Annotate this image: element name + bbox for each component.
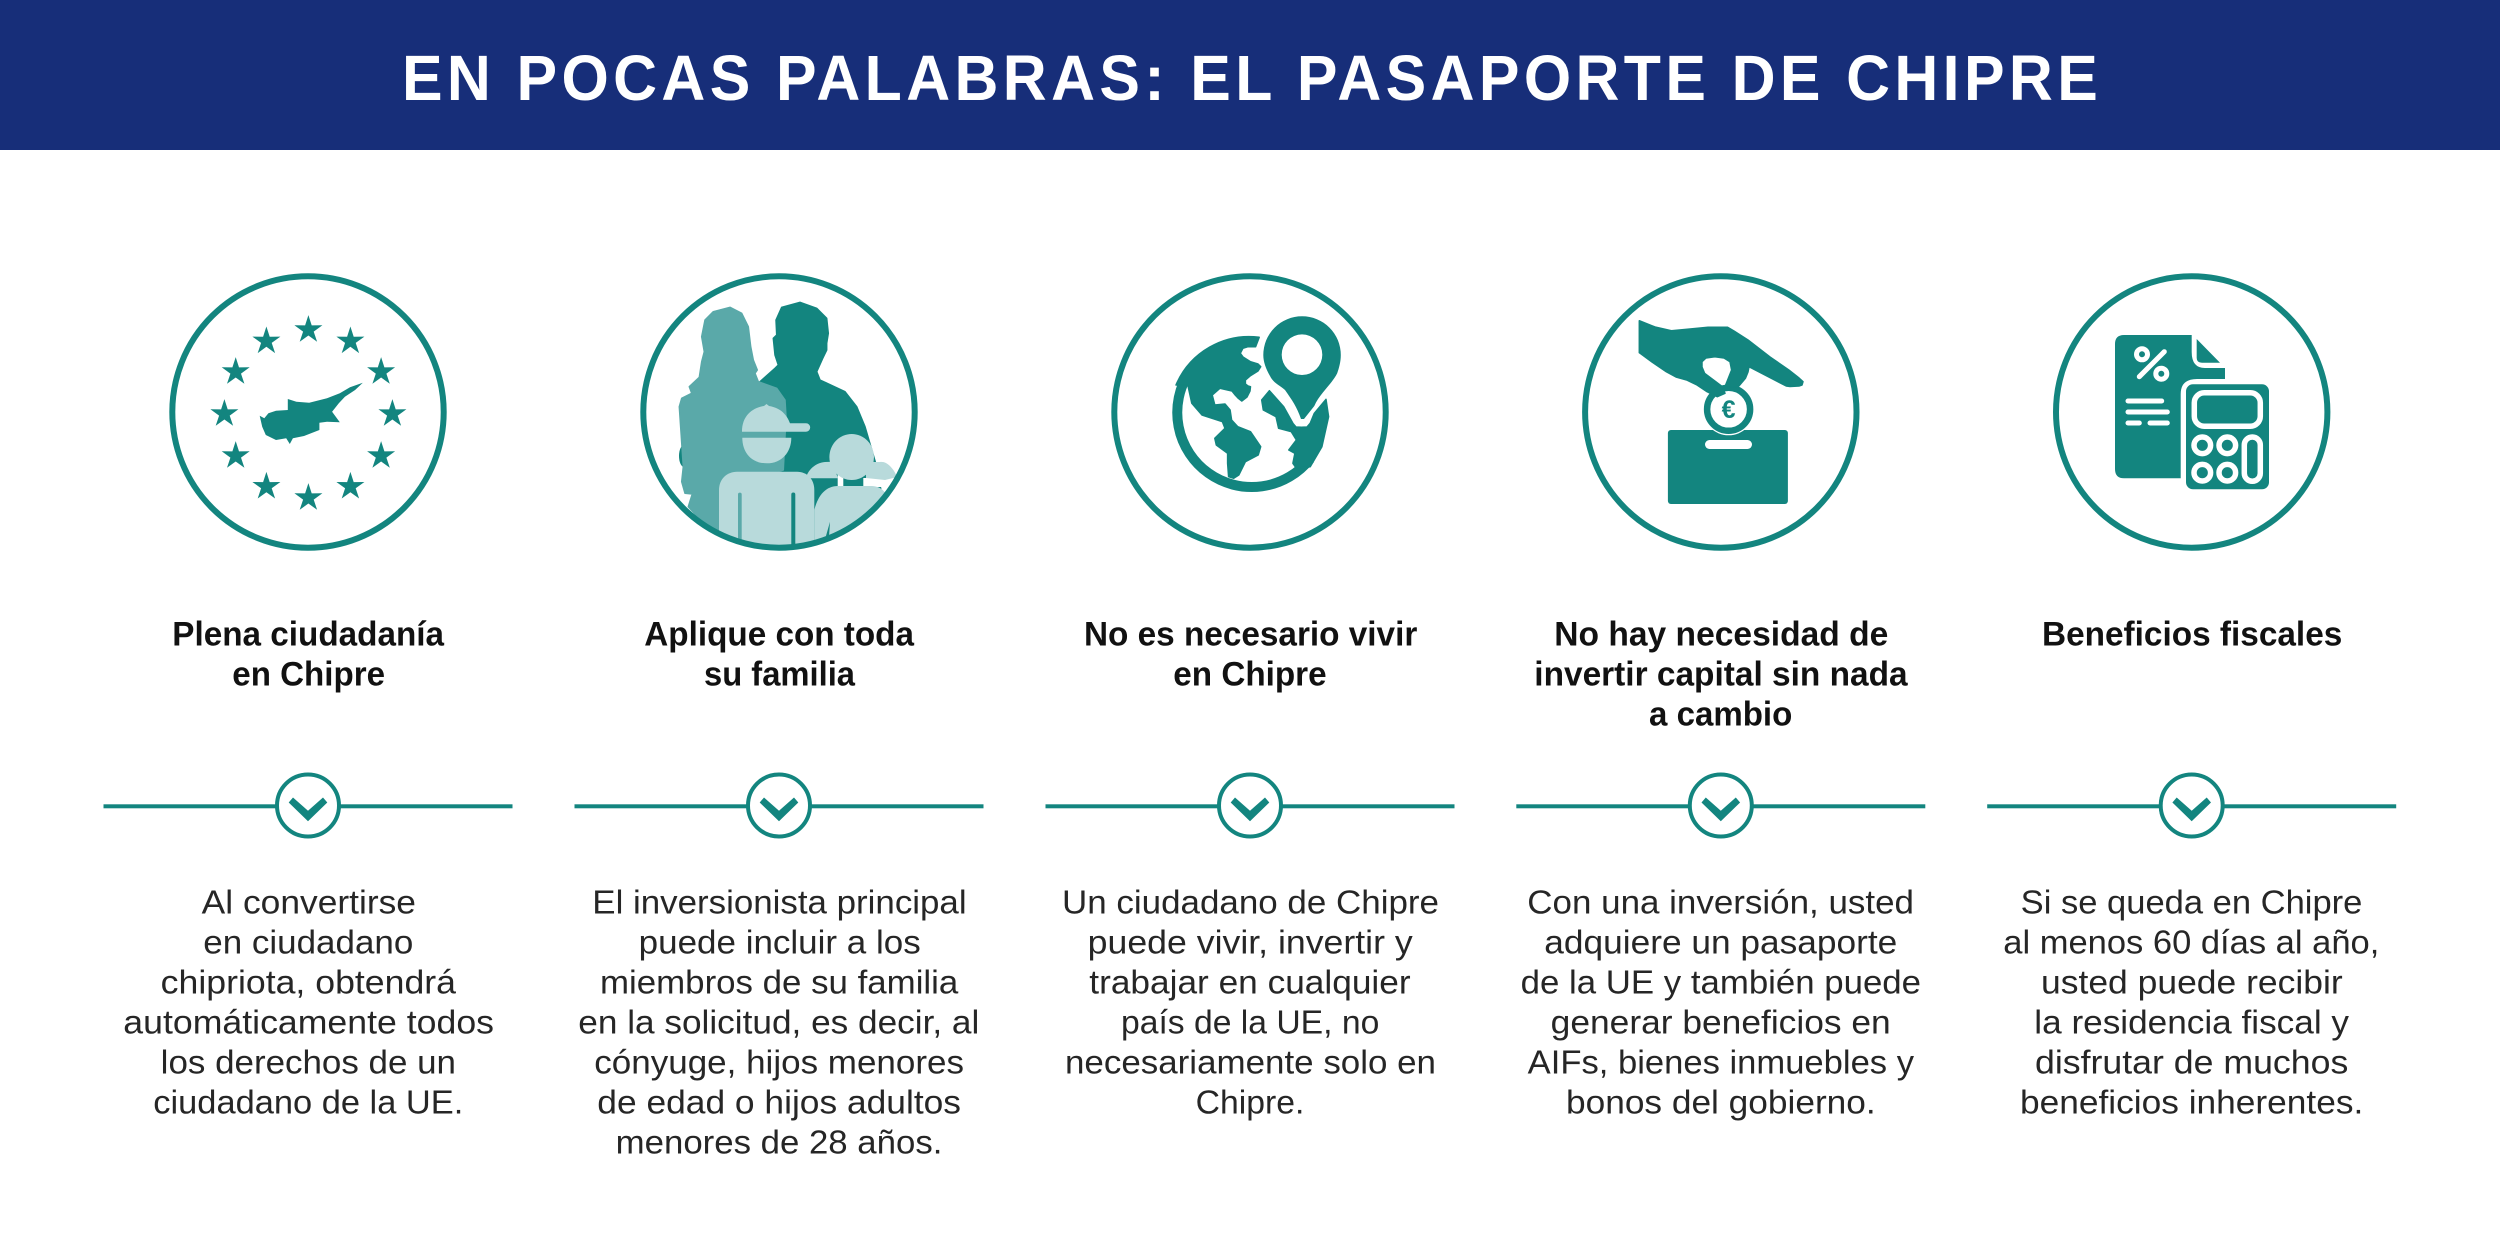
icon: hand dropping euro coin into box <box>1585 276 1857 548</box>
body text: en ciudadano <box>203 924 413 961</box>
panel: no hay necesidad de invertir capital <box>1516 276 1925 1121</box>
body text: El inversionista principal <box>592 884 967 921</box>
body text <box>1521 884 1921 1121</box>
body text: menores de 28 años. <box>616 1124 942 1161</box>
body text: adquiere un pasaporte <box>1544 924 1897 961</box>
heading: su familia <box>704 656 856 694</box>
body text: Con una inversión, usted <box>1527 884 1914 921</box>
body text: al menos 60 días al año, <box>2003 924 2379 961</box>
panel: aplique con toda su familia <box>574 276 984 1161</box>
body text: puede vivir, invertir y <box>1088 924 1413 961</box>
divider with chevron <box>1516 774 1925 836</box>
body text <box>123 884 494 1121</box>
icon: globe with location pin <box>1114 276 1386 548</box>
body text: la residencia fiscal y <box>2034 1004 2350 1041</box>
body text: Un ciudadano de Chipre <box>1062 884 1439 921</box>
body text: Si se queda en Chipre <box>2021 884 2362 921</box>
icon: family silhouettes <box>643 276 915 557</box>
icon: EU stars and Cyprus map <box>172 276 444 548</box>
heading: a cambio <box>1649 696 1792 734</box>
body text: cónyuge, hijos menores <box>594 1044 964 1081</box>
body text: beneficios inherentes. <box>2020 1084 2363 1121</box>
divider with chevron <box>104 774 512 836</box>
panel: no es necesario vivir en Chipre <box>1046 276 1454 1121</box>
body text: en la solicitud, es decir, al <box>578 1004 979 1041</box>
heading: No hay necesidad de <box>1554 616 1888 654</box>
body text: chipriota, obtendrá <box>161 964 457 1001</box>
body text: trabajar en cualquier <box>1089 964 1411 1001</box>
heading: Beneficios fiscales <box>2042 616 2342 654</box>
divider with chevron <box>1987 774 2396 836</box>
icon: tax document and calculator <box>2056 276 2327 548</box>
body text: puede incluir a los <box>639 924 921 961</box>
heading: Aplique con toda <box>644 616 915 654</box>
body text: Al convertirse <box>202 884 416 921</box>
body text: bonos del gobierno. <box>1566 1084 1876 1121</box>
body text: AIFs, bienes inmuebles y <box>1528 1044 1915 1081</box>
heading: Plena ciudadanía <box>172 616 445 654</box>
panel: plena ciudadanía <box>104 276 512 1121</box>
body text: miembros de su familia <box>600 964 959 1001</box>
heading <box>644 616 915 694</box>
icon: hand dropping euro coin into box: € <box>1722 396 1736 424</box>
body text: automáticamente todos <box>123 1004 494 1041</box>
heading: en Chipre <box>1173 656 1327 694</box>
heading <box>1534 616 1909 734</box>
divider with chevron <box>574 774 984 836</box>
heading: en Chipre <box>232 656 385 694</box>
title: EN POCAS PALABRAS: EL PASAPORTE DE CHIPRE <box>402 43 2098 114</box>
body text <box>1062 884 1439 1121</box>
heading: No es necesario vivir <box>1084 616 1417 654</box>
heading: invertir capital sin nada <box>1534 656 1909 694</box>
body text <box>2003 884 2379 1121</box>
body text: generar beneficios en <box>1551 1004 1891 1041</box>
body text: necesariamente solo en <box>1065 1044 1436 1081</box>
body text: los derechos de un <box>161 1044 456 1081</box>
body text: ciudadano de la UE. <box>153 1084 463 1121</box>
body text <box>578 884 979 1161</box>
divider with chevron <box>1046 774 1454 836</box>
body text: disfrutar de muchos <box>2035 1044 2348 1081</box>
body text: país de la UE, no <box>1121 1004 1379 1041</box>
body text: de la UE y también puede <box>1521 964 1921 1001</box>
heading <box>1084 616 1417 694</box>
body text: Chipre. <box>1196 1084 1304 1121</box>
body text: de edad o hijos adultos <box>597 1084 961 1121</box>
title banner <box>0 0 2500 150</box>
body text: usted puede recibir <box>2041 964 2343 1001</box>
heading <box>172 616 445 694</box>
panel: beneficios fiscales <box>1987 276 2396 1121</box>
